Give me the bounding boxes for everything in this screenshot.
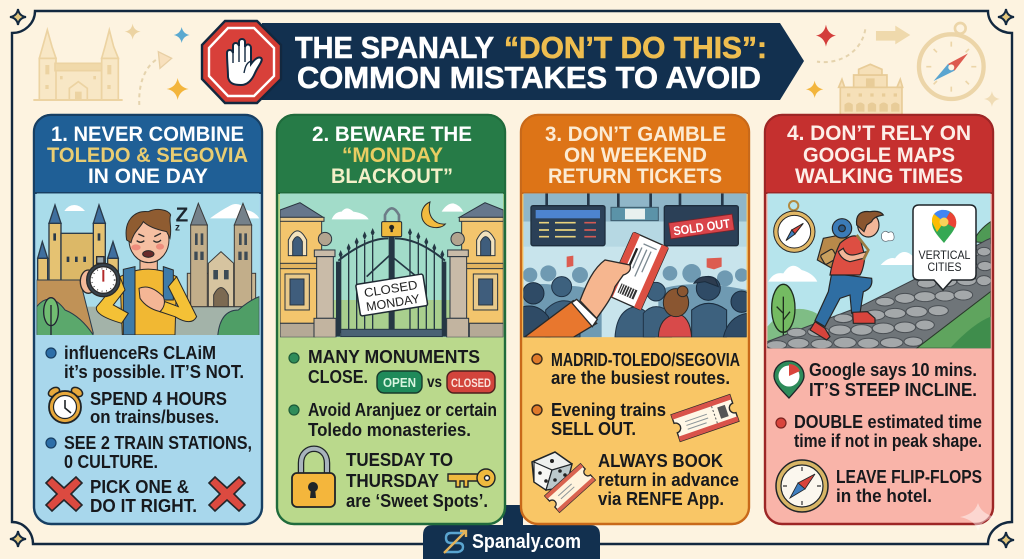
heading: panel 3: 3. DON’T GAMBLE [545, 123, 726, 146]
bullet list: panel 1: SPEND 4 HOURS [90, 388, 227, 409]
badge: open: OPEN [383, 376, 416, 390]
bullet list: panel 4 [776, 359, 982, 506]
sleepy Z marks: z [175, 223, 180, 234]
heading: panel 1 [47, 123, 248, 188]
heading: panel 4: 4. DON’T RELY ON [787, 122, 971, 145]
bullet list: panel 3: return in advance [598, 469, 739, 490]
bullet list: panel 4: time if not in peak shape. [794, 430, 982, 451]
icon: padlock [292, 449, 335, 507]
sleepy Z marks: Z [176, 204, 189, 227]
pocket compass [774, 201, 815, 252]
bullet list: panel 2: are ‘Sweet Spots’. [346, 490, 488, 511]
bullet list: panel 2 [289, 346, 497, 511]
sign: closed Monday [356, 274, 428, 316]
bullet list: panel 2: THURSDAY [346, 470, 440, 491]
title text: COMMON MISTAKES TO AVOID [297, 60, 761, 95]
badge: closed: CLOSED [451, 376, 491, 390]
banner: sold out: SOLD OUT [672, 217, 731, 238]
bullet list: panel 1: influenceRs CLAiM [64, 342, 216, 363]
heading: panel 1: 1. NEVER COMBINE [51, 123, 244, 146]
title text: THE SPANALY [295, 30, 494, 65]
icon: alarm clock [47, 386, 84, 423]
icon: red cross left [46, 477, 82, 511]
panel: 2 beware the Monday blackout [277, 115, 505, 524]
stopwatch [80, 257, 120, 297]
bullet list: panel 1: SEE 2 TRAIN STATIONS, [64, 432, 252, 453]
panel: 1 never combine Toledo and Segovia [34, 115, 262, 524]
icon: stop sign with hand [202, 21, 281, 103]
bullet list: panel 3 [532, 349, 740, 509]
heading: panel 4: WALKING TIMES [795, 165, 963, 188]
icon: timer map pin [774, 361, 804, 398]
panel: 3 don't gamble on weekend return tickets [521, 115, 752, 524]
bullet list: panel 1: it’s possible. IT’S NOT. [64, 361, 244, 382]
bullet list: panel 2: Toledo monasteries. [308, 419, 471, 440]
bullet list: panel 1: DO IT RIGHT. [90, 495, 197, 516]
woman with bun [658, 286, 692, 337]
sign: closed Monday: CLOSED [363, 278, 419, 300]
bullet list: panel 2: MANY MONUMENTS [308, 346, 480, 367]
cobbled slope [767, 238, 991, 348]
illustration: exhausted traveller between castle and cathedral [37, 193, 259, 337]
label: vs: vs [427, 374, 442, 391]
bullet list: panel 2: CLOSE. [308, 366, 368, 387]
map callout: vertical cities: VERTICAL [918, 250, 971, 262]
bullet list: panel 3: SELL OUT. [551, 418, 636, 439]
left wing [280, 203, 336, 337]
bullet list: panel 1: on trains/buses. [90, 406, 219, 427]
icon: map pin [932, 210, 956, 243]
bullet list: panel 3: via RENFE App. [598, 488, 724, 509]
heading: panel 3: RETURN TICKETS [548, 165, 722, 188]
panel: 4 don't rely on Google Maps walking times [765, 115, 996, 531]
footer text: Spanaly.com [472, 531, 581, 553]
map callout: vertical cities [913, 205, 976, 290]
heading: panel 2: BLACKOUT” [331, 165, 453, 188]
badge: open [377, 371, 422, 393]
heading: panel 2: “MONDAY [342, 144, 443, 167]
heading: panel 1: IN ONE DAY [88, 165, 208, 188]
title banner [262, 23, 804, 100]
icon: Spanaly logo [444, 531, 466, 553]
bullet list: panel 1: 0 CULTURE. [64, 451, 158, 472]
map callout: vertical cities: CITIES [928, 262, 962, 274]
iron gate [338, 223, 445, 337]
decoration: sparkle on panel corner [960, 503, 996, 531]
illustration: hiker on a steep cobbled street [767, 193, 992, 349]
heading: panel 4 [787, 122, 971, 188]
icon: train ticket [671, 395, 739, 441]
illustration: crowded station and ticket [523, 193, 752, 337]
bullet list: panel 4: Google says 10 mins. [809, 359, 977, 380]
padlock on gate [382, 208, 402, 237]
icon: dice and ticket [532, 452, 595, 512]
heading: panel 2 [312, 123, 472, 188]
decoration: top right compass, arrow, palace and stars [806, 23, 1000, 117]
bullet list: panel 1 [46, 342, 252, 516]
bullet list: panel 4: LEAVE FLIP-FLOPS [836, 466, 982, 487]
bullet list: panel 1: PICK ONE & [90, 476, 189, 497]
heading: panel 2: 2. BEWARE THE [312, 123, 472, 146]
heading: panel 4: GOOGLE MAPS [803, 144, 955, 167]
hand and orange sleeve [524, 260, 630, 337]
hiker [810, 211, 883, 340]
bullet list: panel 4: in the hotel. [836, 485, 932, 506]
icon: compass [776, 460, 828, 512]
heading: panel 1: TOLEDO & SEGOVIA [47, 144, 248, 167]
traveller [96, 209, 197, 335]
illustration: locked monument gate [280, 193, 503, 337]
right wing [447, 203, 503, 337]
bullet list: panel 3: ALWAYS BOOK [598, 450, 724, 471]
heading: panel 3 [545, 123, 726, 188]
bullet list: panel 3: Evening trains [551, 399, 666, 420]
bullet list: panel 2: Avoid Aranjuez or certain [308, 399, 497, 420]
bullet list: panel 2: TUESDAY TO [346, 449, 453, 470]
heading: panel 3: ON WEEKEND [564, 144, 707, 167]
icon: golden key [448, 469, 495, 487]
sign: closed Monday: MONDAY [365, 292, 421, 314]
decoration: top left castle and stars [33, 24, 190, 105]
footer tab: Spanaly.com [423, 505, 600, 559]
back crowd [523, 264, 748, 337]
front crowd [546, 277, 672, 337]
icon: red cross right [209, 477, 245, 511]
bullet list: panel 3: are the busiest routes. [551, 367, 730, 388]
badge: closed [447, 371, 495, 393]
title text [295, 30, 767, 95]
bullet list: panel 3: MADRID-TOLEDO/SEGOVIA [551, 349, 740, 370]
title text: “DON’T DO THIS”: [504, 30, 767, 65]
bullet list: panel 4: DOUBLE estimated time [794, 411, 982, 432]
ticket in hand [606, 232, 668, 310]
bullet list: panel 4: IT’S STEEP INCLINE. [809, 379, 977, 400]
